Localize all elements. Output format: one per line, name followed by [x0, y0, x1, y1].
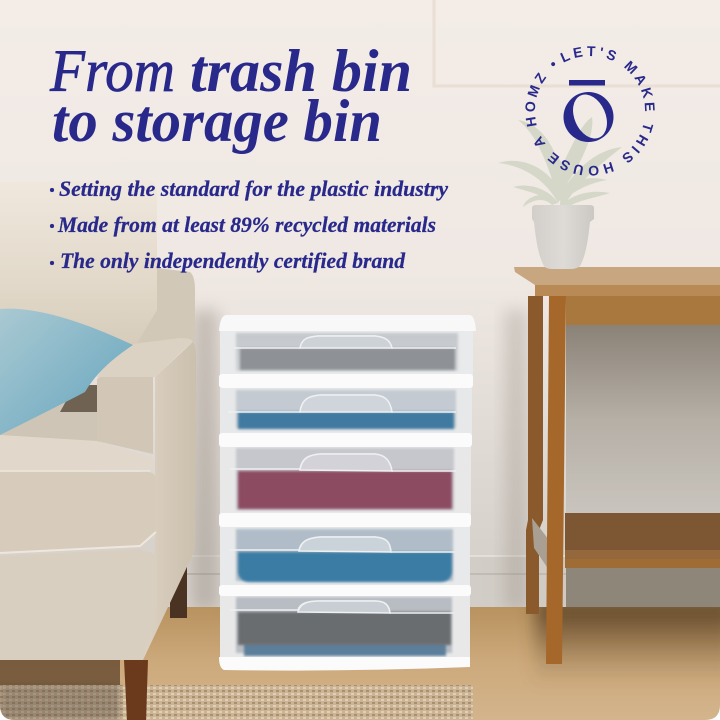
folded maroon towel [238, 471, 452, 509]
title: From [49, 38, 175, 104]
baseboard [187, 555, 566, 575]
band [219, 374, 473, 388]
wood floor [0, 600, 720, 720]
sofa [0, 180, 196, 720]
drawer 5 [219, 585, 471, 671]
bullet 3: The only independently certified brand [60, 248, 406, 273]
title: to storage bin [52, 88, 382, 154]
blue towel under [244, 643, 446, 656]
back cushion [0, 180, 157, 350]
seat front [0, 472, 156, 552]
arm side [143, 342, 196, 660]
handle [300, 395, 392, 412]
band [219, 513, 471, 527]
arm rear [136, 268, 195, 345]
handle [298, 601, 390, 613]
pot [532, 205, 594, 269]
apron [566, 296, 720, 325]
gap shadow [60, 385, 97, 412]
plastic drawer tower [219, 315, 476, 671]
table top [514, 267, 720, 285]
bullet 2: Made from at least 89% recycled materials [57, 212, 436, 237]
seat top [0, 435, 147, 458]
back leg [526, 296, 543, 614]
drawer 4 [219, 513, 471, 586]
logo ring [564, 92, 614, 142]
folded grey towel [240, 348, 455, 370]
seat base [0, 549, 157, 660]
handle [300, 336, 392, 348]
bullet list [50, 176, 448, 273]
leaves [498, 117, 622, 208]
sofa floor shadow [0, 660, 120, 685]
handle [299, 537, 391, 552]
band [219, 585, 471, 596]
logo bar [569, 80, 605, 86]
band [219, 433, 472, 447]
baseboard under table [566, 568, 720, 607]
drawer 3 [219, 433, 472, 514]
pillow [0, 309, 133, 435]
folded charcoal towel [238, 612, 451, 645]
picture frame [434, 0, 720, 86]
title: trash bin [190, 38, 412, 104]
folded blue towel [238, 412, 454, 429]
lid [219, 315, 476, 331]
title [49, 38, 412, 154]
wall shadow under table [566, 325, 720, 513]
handle [300, 454, 392, 471]
wall shadow beside sofa [192, 310, 218, 610]
potted plant [498, 117, 622, 269]
front leg [124, 660, 148, 720]
circular slogan: LET'S MAKE THIS HOUSE A HOMZ • [525, 46, 655, 176]
arm top [97, 338, 193, 377]
drawer 2 [219, 374, 473, 434]
drawer 1 [219, 315, 476, 376]
seat back shade [0, 402, 100, 442]
side table [514, 267, 720, 664]
base [219, 657, 470, 671]
wall shadow beside table [505, 310, 527, 610]
lower shelf [565, 513, 720, 568]
front leg [546, 296, 566, 664]
folded teal towel [238, 552, 452, 582]
bullet 1: Setting the standard for the plastic industry [59, 176, 448, 201]
brand badge [525, 46, 655, 176]
back leg [170, 567, 187, 618]
arm front [97, 377, 153, 454]
woven rug [0, 685, 473, 720]
